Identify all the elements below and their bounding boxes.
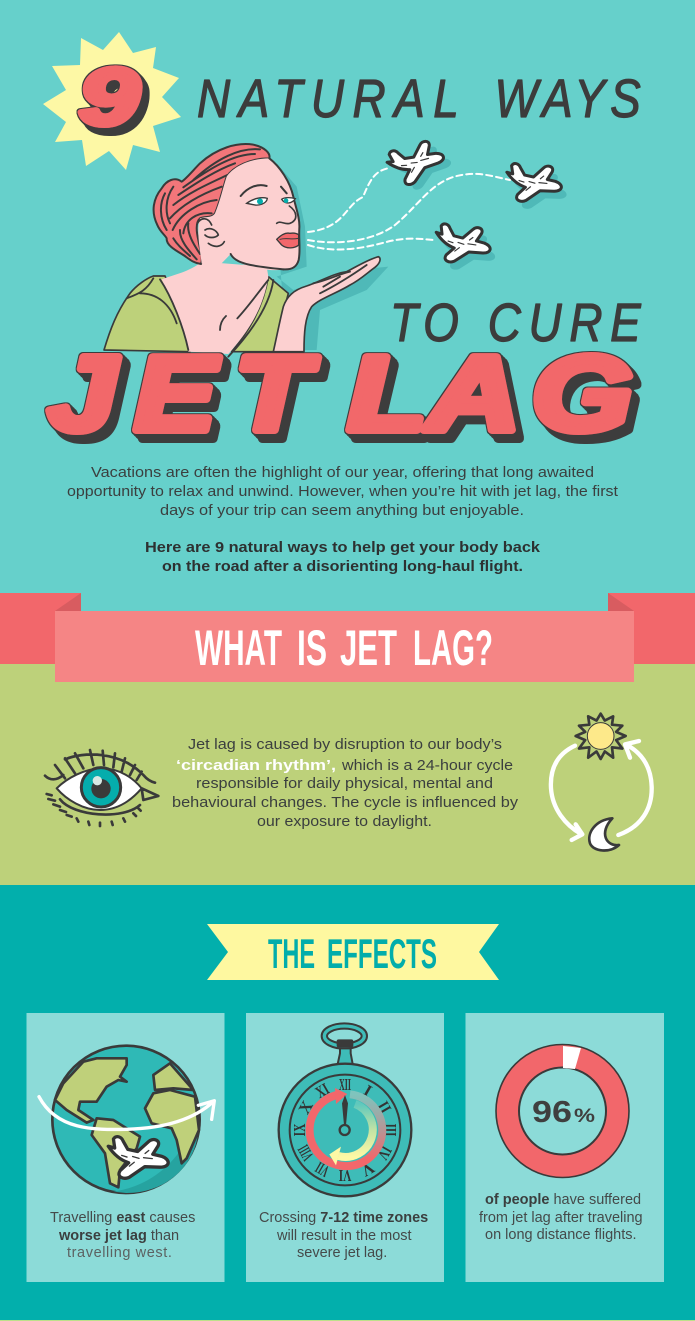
heading: natural ways: NATURAL bbox=[197, 69, 459, 129]
intro line 1: Vacations are often the highlight of our year, offering that long awaited bbox=[91, 464, 594, 481]
skin: arm and hand bbox=[273, 257, 380, 352]
donut remainder bbox=[563, 1046, 581, 1069]
intro line 2: opportunity to relax and unwind. However, when you’re hit with jet lag, the first bbox=[67, 483, 619, 500]
card background bbox=[246, 1013, 444, 1282]
numeral 10: X bbox=[294, 1097, 317, 1117]
numeral 11: XI bbox=[312, 1079, 332, 1102]
eye white bbox=[57, 768, 142, 810]
ribbon right tail bbox=[608, 593, 695, 664]
iris right bbox=[284, 198, 288, 203]
ribbon front bbox=[55, 611, 634, 682]
chest and hand lines bbox=[127, 265, 367, 357]
card text: Travelling east causes bbox=[50, 1210, 195, 1226]
icon: globe bbox=[39, 1046, 214, 1193]
icon: circadian cycle bbox=[551, 714, 652, 850]
icon: plane on globe bbox=[105, 1135, 170, 1183]
donut inner edge bbox=[519, 1068, 606, 1154]
text: what is jet lag bbox=[172, 736, 519, 830]
ribbon title: JET bbox=[340, 620, 397, 676]
icon: plane three bbox=[431, 222, 499, 275]
fading red arc bbox=[335, 1094, 382, 1166]
sun badge with number 9 bbox=[43, 32, 181, 170]
watch ring band bbox=[324, 1026, 364, 1046]
plane two details bbox=[518, 174, 548, 192]
ribbon title: WHAT bbox=[195, 620, 282, 676]
hair strands bbox=[161, 149, 260, 259]
card background bbox=[26, 1013, 224, 1282]
eye outline bbox=[247, 198, 267, 205]
cycle arrow left bbox=[551, 746, 582, 840]
icon: yellow starburst bbox=[43, 32, 181, 170]
ribbon left fold bbox=[55, 593, 81, 611]
mouth line bbox=[280, 238, 298, 239]
plane two body bbox=[504, 162, 563, 205]
eye right bbox=[282, 198, 295, 203]
body line 3: responsible for daily physical, mental and bbox=[196, 775, 493, 792]
clock centre bbox=[340, 1125, 350, 1135]
watch case bbox=[279, 1064, 411, 1196]
red arc bbox=[310, 1095, 338, 1164]
ribbon left tail bbox=[0, 593, 81, 664]
card text: on long distance flights. bbox=[485, 1227, 637, 1243]
highlighted term: ‘circadian rhythm’, bbox=[176, 757, 336, 774]
body line 1: Jet lag is caused by disruption to our body’s bbox=[188, 736, 502, 753]
donut outer edge bbox=[496, 1044, 629, 1178]
bottom edge line bbox=[0, 1320, 695, 1321]
sun disc bbox=[587, 723, 614, 749]
numeral 7: VII bbox=[312, 1158, 332, 1181]
banner shape bbox=[207, 924, 499, 980]
brow bbox=[241, 185, 287, 196]
card text: Crossing 7-12 time zones bbox=[259, 1210, 428, 1226]
trail two bbox=[308, 174, 510, 242]
plane three shadow bbox=[437, 230, 498, 275]
body line 5: our exposure to daylight. bbox=[257, 813, 432, 830]
lips bbox=[277, 233, 299, 248]
flight trails bbox=[308, 168, 510, 250]
card: 96 percent bbox=[466, 1013, 664, 1282]
pupil bbox=[91, 779, 111, 798]
ribbon: what is jet lag bbox=[0, 593, 695, 682]
intro text bbox=[67, 464, 619, 575]
woman shadow bbox=[277, 163, 388, 350]
value 96: 96 bbox=[532, 1094, 572, 1129]
number 9: 9 bbox=[79, 52, 139, 142]
continents bbox=[55, 1058, 199, 1187]
eye left bbox=[247, 198, 267, 205]
panel: what is jet lag background bbox=[0, 664, 695, 885]
percent sign: % bbox=[574, 1106, 595, 1127]
panel: header background bbox=[0, 0, 695, 664]
plane one details bbox=[400, 152, 431, 174]
numeral 8: VIII bbox=[294, 1142, 317, 1164]
moon bbox=[589, 818, 619, 850]
watch crown bbox=[337, 1039, 353, 1047]
trail three bbox=[308, 239, 434, 250]
red arrowhead bbox=[335, 1088, 347, 1104]
icon: plane one bbox=[384, 136, 456, 195]
banner: the effects bbox=[207, 924, 499, 980]
plane one body bbox=[384, 138, 448, 189]
intro bold line 1: Here are 9 natural ways to help get your body back bbox=[145, 539, 541, 556]
yellow arrowhead bbox=[329, 1147, 341, 1165]
globe shade bbox=[113, 1123, 198, 1193]
numeral 2: II bbox=[374, 1098, 395, 1117]
roman numerals: XII bbox=[339, 1075, 351, 1094]
iris bbox=[81, 768, 121, 807]
numeral 9: IX bbox=[290, 1124, 309, 1136]
globe plane details bbox=[121, 1148, 153, 1168]
heading: to cure: CURE bbox=[488, 293, 641, 353]
intro line 3: days of your trip can seem anything but enjoyable. bbox=[160, 502, 524, 519]
sun bbox=[576, 714, 626, 759]
heading: natural ways: WAYS bbox=[495, 69, 641, 129]
card: time zones bbox=[246, 1013, 444, 1282]
watch dial bbox=[290, 1075, 400, 1185]
card text: severe jet lag. bbox=[297, 1245, 387, 1261]
card text: will result in the most bbox=[276, 1228, 412, 1244]
word: lag: LAG bbox=[348, 335, 633, 453]
ribbon title: IS bbox=[297, 620, 327, 676]
intro bold line 2: on the road after a disorienting long-haul flight. bbox=[162, 558, 523, 575]
globe plane body bbox=[105, 1135, 170, 1183]
banner title: THE bbox=[268, 930, 315, 977]
illustration: woman blowing planes bbox=[104, 144, 388, 357]
jaw line bbox=[231, 254, 283, 269]
yellow arc bbox=[338, 1104, 373, 1157]
clock hand bbox=[342, 1095, 348, 1125]
ribbon right fold bbox=[608, 593, 634, 611]
card: travelling east bbox=[26, 1013, 224, 1282]
plane three body bbox=[432, 222, 493, 267]
word: jet: JET bbox=[48, 335, 318, 453]
banner title: EFFECTS bbox=[327, 930, 437, 977]
trail one bbox=[308, 168, 390, 232]
icon: pocket watch bbox=[279, 1026, 411, 1196]
plane one shadow bbox=[392, 143, 456, 194]
ribbon title: LAG? bbox=[413, 620, 493, 676]
face profile bbox=[269, 158, 300, 269]
heading: jet lag bbox=[48, 335, 633, 453]
numeral 4: IV bbox=[373, 1143, 396, 1163]
face bbox=[198, 158, 300, 270]
roman numerals bbox=[290, 1075, 400, 1185]
plane three details bbox=[447, 234, 477, 254]
nose bbox=[277, 206, 296, 224]
numeral 1: I bbox=[360, 1081, 375, 1100]
dress bbox=[104, 276, 288, 352]
icon: plane two bbox=[503, 162, 569, 213]
icon: eye bbox=[45, 750, 158, 826]
watch ring outline bbox=[324, 1026, 364, 1046]
card text: worse jet lag than bbox=[59, 1228, 179, 1244]
card text: from jet lag after traveling bbox=[479, 1210, 643, 1226]
donut chart bbox=[496, 1044, 629, 1178]
donut ring bbox=[508, 1056, 618, 1166]
heading: to cure: TO bbox=[390, 293, 459, 353]
eyelid and lashes bbox=[45, 750, 158, 826]
plane two shadow bbox=[509, 169, 569, 213]
body line 4: behavioural changes. The cycle is influenced by bbox=[172, 794, 519, 811]
skin: neck and chest bbox=[162, 262, 268, 354]
hair bbox=[154, 144, 270, 264]
watch neck bbox=[338, 1048, 353, 1064]
card background bbox=[466, 1013, 664, 1282]
ocean bbox=[52, 1046, 200, 1193]
ear bbox=[197, 219, 224, 246]
highlight bbox=[93, 776, 102, 785]
numeral 5: V bbox=[358, 1158, 378, 1181]
numeral 6: VI bbox=[339, 1166, 351, 1185]
body line 2: which is a 24-hour cycle bbox=[341, 757, 513, 774]
numeral 3: III bbox=[381, 1124, 400, 1136]
iris bbox=[257, 198, 263, 204]
card text: of people have suffered bbox=[485, 1192, 641, 1208]
panel: effects background bbox=[0, 885, 695, 1320]
cycle arrow right bbox=[618, 741, 652, 835]
card text: travelling west. bbox=[67, 1245, 172, 1261]
eye right outline bbox=[282, 198, 295, 203]
white arrow bbox=[39, 1097, 214, 1129]
